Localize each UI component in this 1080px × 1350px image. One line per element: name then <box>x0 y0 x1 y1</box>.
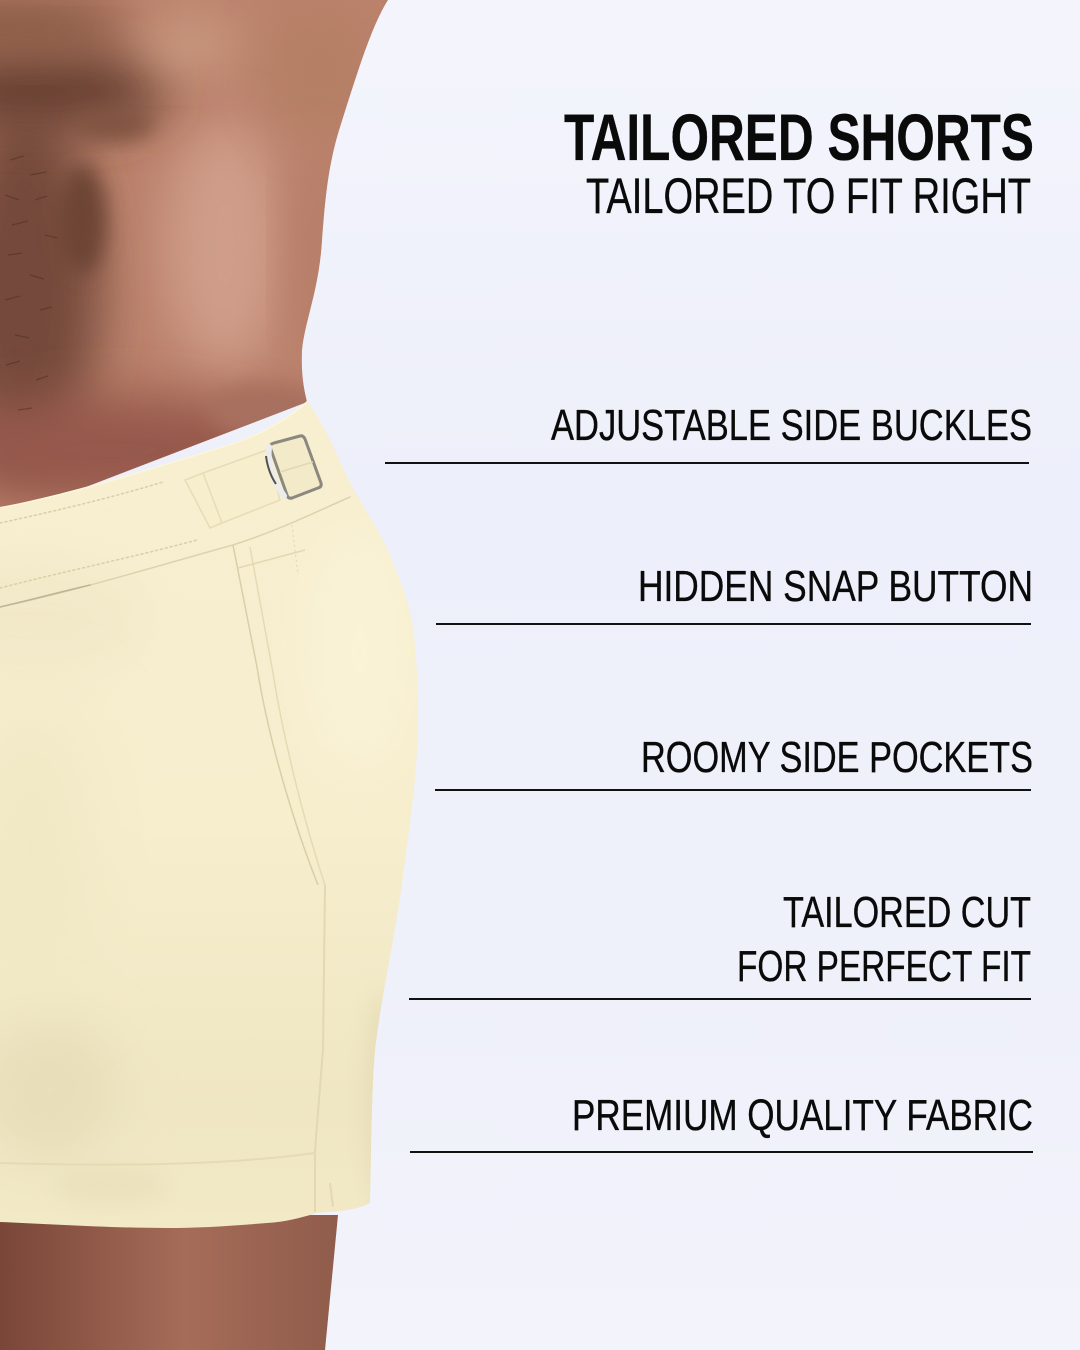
waist edge highlight <box>0 401 307 507</box>
side seam <box>315 885 333 1212</box>
chest and belly hair <box>5 156 57 410</box>
torso shading <box>0 0 370 505</box>
hem stitching <box>0 1153 315 1165</box>
shorts <box>0 401 418 1228</box>
pocket <box>233 525 325 885</box>
icon: buckle <box>266 436 321 498</box>
leg <box>0 1215 338 1350</box>
torso <box>0 0 388 520</box>
strap <box>185 450 280 528</box>
shorts shading <box>0 530 410 1210</box>
waistband stitching <box>0 482 350 607</box>
feature: tailored cut for perfect fit <box>409 888 1031 1000</box>
